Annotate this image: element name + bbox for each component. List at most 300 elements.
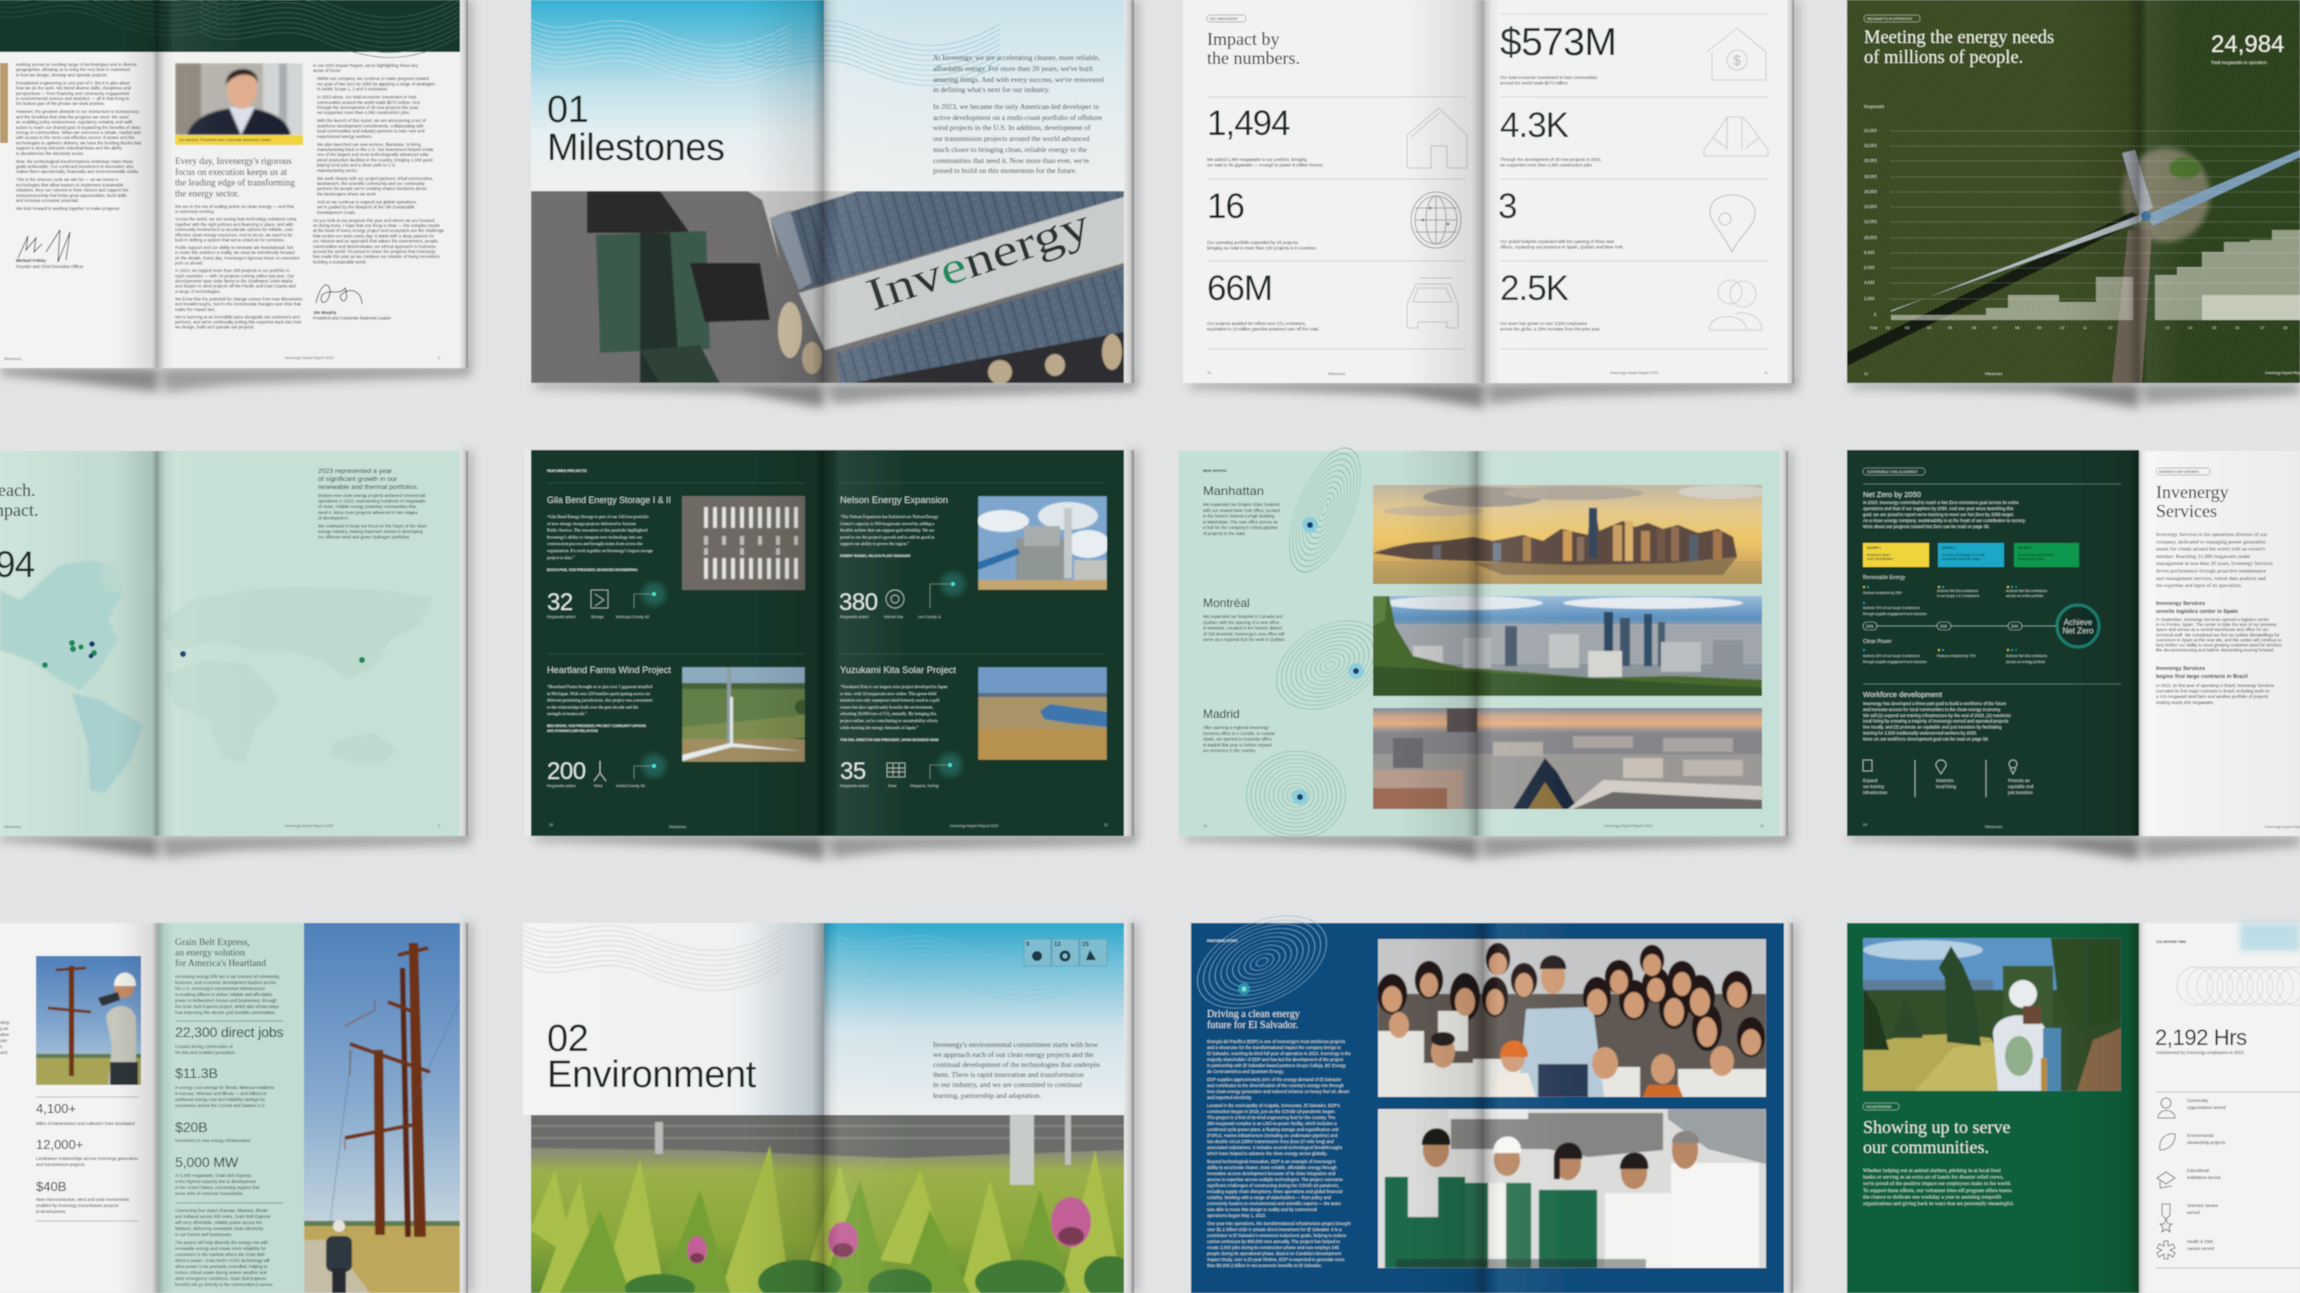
news: logistics center in Spain: help further our ability to meet growing customer need for services: [2156, 642, 2282, 648]
project: Heartland Farms: strength of teamwork.”: [547, 711, 587, 716]
key highlights badge: KEY HIGHLIGHTS: [1210, 17, 1238, 21]
project: Gila Bend: 32: [547, 589, 573, 616]
stat descriptions: offices, expanding our presence in Spain, Québec and New York.: [1500, 245, 1624, 250]
left page stats: in development: [36, 1209, 66, 1214]
left column letter text: the bottom part of the phrase we work positive.: [16, 101, 105, 106]
volunteering badge: [1863, 1103, 1899, 1110]
services intro: and management services, robust data analysis and: [2156, 576, 2266, 582]
project: Nelson: Megawatts added: [840, 615, 868, 619]
Grain Belt heading: an energy solution: [175, 949, 245, 959]
left column letter text: action to reach our shared goal of expanding the benefits of clean: [16, 125, 141, 130]
workforce labels: Promote an: [2008, 778, 2030, 783]
letter right column bullets: experienced energy workers.: [317, 134, 372, 139]
left page text fragments: and: [0, 1050, 8, 1055]
workforce labels: equitable and: [2008, 784, 2034, 789]
footer: Milestones: [1985, 372, 2002, 376]
icon: globe: [1411, 192, 1461, 248]
map marker: [1238, 983, 1250, 995]
key highlights badge: [1207, 15, 1246, 22]
left column letter text: to decarbonize the electricity sector.: [16, 151, 84, 156]
Grain Belt stat text: is the highest-capacity line in development: [175, 1179, 257, 1184]
body text: the chance to dedicate one workday a year to assisting nonprofit: [1863, 1193, 2002, 1200]
intro text: much closer to bringing clean, reliable energy to the: [933, 145, 1088, 154]
letter right column bullets: building a sustainable world.: [313, 259, 367, 264]
photo: engineer with binoculars: [36, 955, 142, 1086]
intro text: in defining what's next for our industry.: [933, 85, 1050, 94]
panel: sustainability and services spread: [1847, 450, 2300, 836]
portrait photo: [174, 62, 303, 136]
letter body text: on the details. Every day, Invenergy's rigorous focus on execution: [175, 255, 300, 260]
dividers: [1207, 14, 1768, 349]
x axis labels: Year: [1870, 326, 1878, 330]
footer: 11: [1104, 823, 1108, 827]
renewable energy row: Achieve 70% of our scope 3 emissions: [1863, 606, 1920, 610]
x axis labels: 03: [1905, 326, 1909, 330]
growth body text: of clean, reliable energy powering communities that: [318, 504, 417, 509]
project: Gila Bend: project to date.”: [547, 555, 575, 560]
y axis labels: 2,000: [1864, 296, 1875, 301]
stat descriptions: bringing our total to more than 100 projects in 8 countries.: [1207, 246, 1317, 251]
workforce development: [1863, 690, 2012, 741]
y axis labels: 18,000: [1864, 174, 1877, 179]
left column letter text: with access to the most cost-effective source of power and the: [16, 135, 135, 140]
feature body text: El Salvador, reaching its third full year of operation in 2023. Invenergy is the: [1207, 1051, 1351, 1056]
letter right column bullets: we supported more than 4,300 construction jobs.: [317, 110, 410, 115]
office: Madrid: our presence in the country.: [1203, 748, 1256, 753]
project: Yuzukami Kita: while meeting the energy demands of Japan.”: [840, 725, 918, 730]
services intro: management in less than 20 years, Invenergy Services: [2156, 561, 2273, 567]
Grain Belt stats: 22,300 direct jobs: [175, 1025, 284, 1041]
yellow caption bar: [175, 135, 303, 145]
x axis labels: 05: [1948, 326, 1952, 330]
Grain Belt body text: to our homes and businesses.: [175, 1232, 232, 1237]
news: contracts in Brazil: [2156, 666, 2274, 705]
left page text fragments: use: [0, 1038, 8, 1043]
service list labels: served: [2187, 1210, 2200, 1215]
intro text: active development on a multi-coast portfolio of offshore: [933, 113, 1103, 122]
map: Europe Asia Africa Australia: [100, 560, 433, 762]
y axis labels: 24,000: [1864, 128, 1877, 133]
left column letter text: goals achievable. Our continued investment in innovation also: [16, 164, 134, 169]
office: Madrid: in Madrid this year to further expand: [1203, 742, 1272, 747]
y axis labels: 0: [1874, 312, 1877, 317]
photo: Montreal skyline: [1372, 596, 1762, 696]
news: logistics center in Spain: customers in Spain at this new site, and the center will continue to: [2156, 637, 2282, 642]
feature body text: over $1.1 billion USD in private direct investment for El Salvador. It is a: [1207, 1227, 1342, 1232]
news: logistics center in Spain: space and serves as a central warehouse and office for our: [2156, 627, 2269, 632]
left column letter text: in how we design, develop and operate projects.: [16, 72, 108, 77]
scope box: green: [2014, 543, 2079, 567]
left column letter text: support a strong domestic industrial base and the ability: [16, 146, 123, 151]
achieve net zero circle: Achieve: [2064, 618, 2093, 627]
intro text: in our industry, and we are committed to continual: [933, 1080, 1082, 1089]
Grain Belt body text: and Indiana) across 800 miles, Grain Belt Express: [175, 1214, 271, 1219]
stat numbers: 1,494: [1207, 104, 1290, 143]
dark green header band: [0, 0, 460, 58]
left column letter text: how we do the work. We blend diverse skills, disciplines and: [16, 86, 131, 91]
letter body text: a range of technologies.: [175, 289, 221, 294]
letter body text: developments span solar farms to the Southwest Union Maize: [175, 278, 294, 284]
letter right column bullets: to tackle Scope 1, 2 and 3 emissions.: [317, 87, 388, 92]
letter body text: Across the world, we are seeing how technology solutions come: [175, 217, 297, 222]
workforce labels: Expand: [1863, 778, 1878, 783]
services intro: the expertise and input of its specialists.: [2156, 582, 2242, 589]
feature body text: de Centroamérica and Quantum Energy.: [1207, 1069, 1284, 1074]
left column letter text: makes them operationally, financially and environmentally viable.: [16, 169, 139, 174]
photo: students with project leader: [1377, 938, 1767, 1098]
y axis labels: 8,000: [1864, 250, 1875, 255]
workforce development: training for 2,500 traditionally underserved workers by 2030.: [1863, 730, 1977, 736]
left column letter text: We look forward to working together to make progress.: [16, 206, 120, 211]
project: Heartland Farms: Megawatts added: [547, 784, 575, 788]
yellow caption bar: Jim Murphy, President and Corporate Business Leader: [179, 138, 272, 142]
letter right column bullets: manufacturing sector.: [317, 168, 358, 173]
services intro: mindset. Reaching 21,000 megawatts under: [2156, 554, 2251, 560]
feature body text: Located in the municipality of Acajutla, Sonsonate, El Salvador, EDP's: [1207, 1103, 1340, 1108]
project: Heartland Farms: Gratiot County, MI: [616, 784, 645, 788]
services heading: Invenergy: [2156, 482, 2229, 502]
workforce development: and increase access for local communities to the clean energy economy.: [1863, 707, 2001, 712]
feature body text: than $6,000.2 billion in net economic benefits to El Salvador.: [1207, 1263, 1322, 1268]
left column letter text: technologies to optimize delivery, we have the building blocks that: [16, 140, 142, 145]
footer: Milestones: [1985, 825, 2002, 829]
letter right column bullets: on doing more, I hope that one thing is clear — the complex needs: [313, 223, 440, 228]
feature body text: including supply chain disruptions, three operations and global financial: [1207, 1189, 1342, 1194]
growth body text: Sixteen new clean energy projects achieved commercial: [318, 493, 425, 498]
clean power row: Achieve 25% of our scope 3 emissions: [1863, 654, 1920, 658]
letter body text: and breakthroughs, but it's the incremental changes over time that: [175, 302, 302, 307]
Grain Belt stat text: the line and enabled generation: [175, 1050, 236, 1055]
panel: Grain Belt Express spread: [0, 923, 468, 1293]
letter body text: Public support and our ability to innovate are foundational. But: [175, 245, 294, 250]
project: Nelson: 380: [839, 589, 878, 616]
office: Manhattan: We expanded our Empire State footprint: [1203, 502, 1280, 507]
office marker: Manhattan: [1302, 517, 1318, 533]
signatory name: Founder and Chief Executive Officer: [16, 264, 84, 269]
left column letter text: Now, the technological transformations underway make these: [16, 159, 134, 164]
footer: Milestones: [669, 825, 686, 829]
footer: Invenergy Impact Report 2023: [950, 824, 998, 828]
news: logistics center in Spain: in As Pontes, Spain. The center is triple the size of our previous: [2156, 622, 2277, 627]
key badge: [1864, 15, 1920, 22]
project: Yuzukami Kita: “Yuzukami Kita is our largest solar project developed in Japan: [840, 684, 948, 689]
left column letter text: perspectives — from financing and community engagement: [16, 91, 130, 96]
scope box: teal: [1938, 543, 2004, 567]
scope box: yellow: level electrification: [1867, 557, 1893, 561]
news: logistics center in Spain: like decommissioning and turbine dismantling moving forward.: [2156, 648, 2274, 653]
service list labels: organizations served: [2187, 1105, 2226, 1110]
Grain Belt stats: 5,000 MW: [175, 1155, 239, 1171]
panel: world map reach spread: [0, 451, 468, 836]
Grain Belt body text: will carry affordable, reliable power across the: [175, 1220, 263, 1225]
project: Heartland Farms: different permitting jurisdictions, this project was a testament: [547, 698, 653, 704]
x axis labels: 10: [2060, 326, 2064, 330]
letter right column bullets: As you look at our progress this year and where we are focused: [313, 218, 435, 223]
left column letter text: energy to communities. When we overcome a rebate, market and: [16, 130, 141, 135]
left page stats: Miles of transmission and collection lines developed: [36, 1121, 135, 1126]
section label: NEW OFFICES: [1203, 469, 1227, 473]
y axis labels: 12,000: [1864, 219, 1877, 224]
renewable energy row: through supplier engagement and reduction: [1863, 612, 1927, 616]
growth heading: of significant growth in our: [318, 476, 398, 483]
Grain Belt intro: the U.S. Invenergy's transmission infrastructure: [175, 986, 266, 991]
project: Heartland Farms: AND STAKEHOLDER RELATIONS: [547, 729, 598, 733]
office: Montreal: Montréal: [1203, 596, 1250, 610]
section label: FEATURED STORY: [1207, 939, 1238, 943]
footer: 24: [1863, 823, 1867, 827]
project: Heartland Farms: to the relationships built over the past decade and the: [547, 704, 638, 709]
intro text: wind projects in the U.S. In addition, development of: [933, 123, 1091, 132]
letter body text: We know that the potential for change comes from new discoveries: [175, 296, 302, 301]
feature body text: (FSRU), marine infrastructure (including an underwater pipeline) and: [1207, 1133, 1338, 1138]
feature body text: and a showcase for the transformational impact the company brings to: [1207, 1045, 1341, 1050]
project: Gila Bend: Gila Bend Energy Storage I & II: [547, 495, 671, 506]
left page stats: Landowner relationships across Invenergy generation: [36, 1156, 139, 1161]
footer: 18: [1203, 824, 1207, 828]
office: Manhattan: of projects in the state.: [1203, 531, 1246, 536]
scope box: teal: renewable electricity usage: [1942, 557, 1981, 561]
volunteering badge: VOLUNTEERISM: [1866, 1105, 1891, 1109]
letter right column bullets: We also launched our new venture, Illuminate, to bring: [317, 142, 421, 147]
heading: of millions of people.: [1864, 48, 2023, 68]
feature body text: construction began in 2019, just as the COVID-19 pandemic began.: [1207, 1109, 1336, 1114]
office: Montreal: We expanded our footprint in Canada and: [1203, 614, 1283, 619]
feature body text: carbon emissions by 800,000 tons annually. The project has helped to: [1207, 1239, 1341, 1244]
clean power row: [1863, 639, 2047, 664]
x axis labels: 04: [1927, 326, 1931, 330]
photo: Heartland Farms turbine: [681, 666, 806, 763]
footer: 10: [549, 823, 553, 827]
letter body text: We're learning at an incredible pace alongside our customers and: [175, 314, 300, 319]
growth heading: renewable and thermal portfolios.: [318, 484, 419, 491]
office: Manhattan: a hub for the company's robust pipeline: [1203, 525, 1278, 530]
news: logistics center in Spain: Invenergy Services: [2156, 601, 2205, 607]
footer: Milestones: [4, 825, 21, 829]
news: contracts in Brazil: executed its first major contracts in Brazil, including work on: [2156, 689, 2270, 694]
letter right column bullets: through the development of 28 new projects this year,: [317, 105, 419, 110]
signatory name Jim Murphy: President and Corporate Business Leader: [313, 316, 392, 320]
icon: house with dollar: [1707, 28, 1766, 80]
intro text: communities that need it. Now more than ever, we're: [933, 156, 1090, 165]
intro text: learning, partnership and adaptation.: [933, 1091, 1041, 1100]
services badge: BUSINESS UNIT GROWTH: [2159, 470, 2199, 474]
footer: Milestones: [1328, 372, 1345, 376]
photo: Nelson plant: [977, 495, 1108, 591]
project: Gila Bend: [547, 495, 671, 619]
service list labels: Educational: [2187, 1168, 2209, 1173]
map markers: [42, 640, 365, 668]
dividers: [547, 483, 1106, 654]
headline stat: 24,984: [2211, 31, 2284, 58]
Grain Belt stat text: consumers across the Central and Eastern U.S.: [175, 1103, 266, 1108]
renewable energy row: Reduce emissions by 25%: [1863, 591, 1902, 595]
feature body text: and imported electricity.: [1207, 1095, 1252, 1100]
stacked bar chart: [1891, 230, 2300, 320]
chapter title: 01: [547, 89, 588, 131]
photo: Madrid skyline: [1372, 708, 1762, 810]
Grain Belt body text: Connecting four states (Kansas, Missouri, Illinois: [175, 1208, 268, 1213]
service list labels: causes served: [2187, 1246, 2215, 1251]
icon: house: [1407, 108, 1467, 168]
feature body text: contributor to El Salvador's emissions reductions goals, helping to reduce: [1207, 1233, 1347, 1238]
workforce labels: our training: [1863, 784, 1885, 789]
left column letter text: solutions, they can reinvest in their citizens and support the: [16, 188, 129, 193]
panel: El Salvador feature spread: [1183, 897, 1793, 1293]
stat descriptions: around the world totals $573 million.: [1500, 81, 1569, 86]
clean power row: Clean Power: [1863, 639, 1892, 645]
project: Gila Bend: Invenergy's ability to integrate new technology into our: [547, 534, 643, 539]
photo: Yuzukami Kita solar: [977, 666, 1108, 761]
services intro: assets for clients around the world with an owner's: [2156, 546, 2265, 553]
contour map: Quebec: [1261, 603, 1399, 727]
project: Heartland Farms: BEN KROHN, VICE PRESIDENT, PROJECT COMMUNITY AFFAIRS: [547, 724, 646, 728]
SDG icons: 13: [1054, 942, 1061, 948]
project: Nelson: Natural Gas: [884, 615, 903, 619]
left column letter text: entrepreneurship that helps grow opportunities, build skills: [16, 193, 127, 198]
letter body text: We are in the era of scaling action on clean energy — and that: [175, 204, 295, 209]
renewable energy row: Achieve Net Zero emissions: [2006, 589, 2047, 593]
chapter title: 02: [547, 1018, 588, 1060]
net zero text: operations and that of our suppliers by 2050. And one year since launching this: [1863, 506, 2013, 511]
SDG icons: [1024, 939, 1107, 966]
feature body text: Impact Study, over a 20-year lifetime, EDP is expected to generate more: [1207, 1257, 1345, 1262]
left page stats: 12,000+: [36, 1137, 83, 1152]
feature body text: in partnership with El Salvador-based partners Grupo Calleja, BC Energy: [1207, 1063, 1347, 1068]
contour map: New York: [1275, 439, 1375, 581]
map: Americas: [0, 560, 143, 793]
signature Jim Murphy: [316, 285, 362, 304]
stat descriptions: we supported more than 4,300 construction jobs.: [1500, 163, 1593, 168]
footer: 19: [1760, 824, 1764, 828]
letter body text: puts us ahead.: [175, 261, 203, 266]
left page text fragments: s: [0, 1044, 2, 1049]
clean power row: Reduce emissions by 70%: [1937, 654, 1976, 658]
project: Heartland Farms: 200: [547, 758, 586, 785]
Grain Belt stat text: Investment in new energy infrastructure: [175, 1138, 251, 1143]
y axis labels: 14,000: [1864, 204, 1877, 209]
sustainability badge: [1863, 468, 1925, 475]
feature body text: majority shareholder of EDP and has led the development of the project: [1207, 1057, 1344, 1062]
feature body text: innovative access development because of its close integration and: [1207, 1171, 1336, 1176]
project: Nelson: [839, 495, 948, 619]
office: Manhattan: with our newest New York office, located: [1203, 508, 1280, 513]
feature body text: was able to move this design to reality and by commercial: [1207, 1207, 1317, 1212]
scope box: green: Develop key partnerships: [2018, 553, 2054, 557]
letter right column bullets: that excites our team every day. It starts with a deep passion for: [313, 233, 435, 238]
growth body text: need it. Many more projects advanced to late stages: [318, 510, 418, 515]
SDG icons: 9: [1026, 942, 1030, 948]
feature body text: and contributes to the diversification of the country's energy mix through: [1207, 1083, 1344, 1088]
workforce development: More on our workforce development goal can be read on page 58.: [1863, 736, 1989, 741]
scope box: green: furthering the goal: [2018, 557, 2044, 561]
news: logistics center in Spain: In September, Invenergy Services opened a logistics center: [2156, 617, 2270, 622]
clean power row: Achieve Net Zero emissions: [2006, 654, 2047, 658]
signature Michael Polsky: [18, 230, 70, 262]
intro text: poised to build on this momentum for the future.: [933, 166, 1077, 175]
pull quote: Every day, Invenergy's rigorous: [175, 156, 292, 166]
pull quote: the leading edge of transforming: [175, 178, 295, 188]
achieve net zero circle: [2057, 605, 2099, 647]
icon: house with dollar: $: [1733, 52, 1741, 68]
x axis labels: 15: [2212, 326, 2216, 330]
x axis labels: 13: [2165, 326, 2169, 330]
Grain Belt stat text: in the United States, connecting regions that: [175, 1185, 260, 1190]
news: logistics center in Spain: technical staff. We completed our first six turbine dismantlings for: [2156, 632, 2280, 637]
news: contracts in Brazil: begins first large contracts in Brazil: [2156, 674, 2248, 680]
project: Gila Bend: Storage: [591, 615, 604, 619]
SDG icons: 15: [1082, 942, 1089, 948]
letter right column bullets: We work closely with our project partners, tribal communities,: [317, 176, 433, 181]
letter body text: we design, build and operate our projects.: [175, 325, 255, 330]
project: Yuzukami Kita: Yuzukami Kita Solar Project: [840, 665, 956, 676]
renewable energy row: [1863, 575, 2047, 616]
stat descriptions: Our team has grown to over 2,500 employees: [1500, 321, 1587, 326]
news: logistics center in Spain: [2156, 601, 2282, 653]
stat descriptions: our total to 35 gigawatts — enough to power 8 million homes.: [1207, 163, 1324, 168]
body text: we're proud of the positive impact our employees make in the world.: [1863, 1180, 2011, 1187]
scope box: yellow: SCOPE 1: [1867, 546, 1881, 550]
office: Madrid: Madrid: [1203, 707, 1240, 721]
Grain Belt intro: how improving the electric grid benefits communities.: [175, 1010, 276, 1015]
footer: 9: [438, 356, 440, 360]
renewable energy row: Achieve Net Zero emissions: [1937, 589, 1978, 593]
chart grid lines: [1890, 131, 2300, 299]
photo: aerial of Invenergy battery containers: [530, 190, 1124, 384]
renewable energy row: across our entire portfolio: [2006, 594, 2043, 598]
feature body text: community leaders to environmental and scientific experts — the team: [1207, 1201, 1341, 1206]
letter right column bullets: has made this year as we continue our mission of being innovators: [313, 254, 440, 259]
left page stats: [36, 1097, 139, 1221]
growth body text: operations in 2023, representing hundreds of megawatts: [318, 499, 426, 504]
office: Manhattan: in Manhattan. The new office serves as: [1203, 519, 1278, 524]
letter right column bullets: Within our company, we continue to make progress toward: [317, 76, 429, 81]
Grain Belt heading: for America's Heartland: [175, 958, 266, 969]
stat number $573M: $573M: [1500, 21, 1616, 64]
pull quote: focus on execution keeps us at: [175, 167, 287, 177]
footer: Invenergy Impact Report 2023: [285, 356, 333, 360]
growth body text: of development.: [318, 515, 349, 520]
project: Heartland Farms: in Michigan. With over 230 families participating across six: [547, 691, 651, 696]
project: Gila Bend: Maricopa County, AZ: [616, 615, 650, 619]
left column letter text: and increase economic potential.: [16, 198, 79, 203]
project: Nelson: Center's capacity to 960 megawatts served by adding a: [840, 521, 934, 526]
project: Yuzukami Kita: project online, we're contributing to sustainability efforts: [840, 718, 938, 724]
panel: volunteering spread: [1847, 923, 2300, 1293]
contour map: Spain: [1246, 751, 1346, 839]
project: Yuzukami Kita: course but also significantly benefits the environment,: [840, 704, 933, 710]
x axis labels: 16: [2235, 326, 2239, 330]
Grain Belt intro: Increasing energy bills are a top concern of community,: [175, 974, 280, 979]
office: Montreal: of Old Montréal, Invenergy's new office will: [1203, 631, 1284, 636]
Grain Belt stat text: Created during construction of: [175, 1044, 233, 1049]
body text: banks or serving as an extra set of hands for disaster relief crews,: [1863, 1174, 2004, 1181]
section label: FEATURED PROJECTS: [547, 469, 587, 473]
body text: To support these efforts, our volunteer time-off program offers teams: [1863, 1187, 2012, 1194]
body text: Whether helping out at animal shelters, pitching in at local food: [1863, 1167, 2001, 1174]
letter right column bullets: the landscapes where we work.: [317, 191, 377, 196]
heading: Showing up to serve: [1863, 1117, 2010, 1137]
letter right column bullets: paying local jobs and a clean path to U.S.: [317, 163, 396, 168]
pull quote: the energy sector.: [175, 188, 239, 198]
intro text: Invenergy's environmental commitment starts with how: [933, 1040, 1098, 1049]
project: Yuzukami Kita: offsetting 30,000 tons of CO₂ annually. By bringing this: [840, 711, 937, 717]
office: Madrid: [1203, 707, 1275, 753]
intro text: In 2023, we became the only American-led developer in: [933, 102, 1099, 111]
scope box: green: SCOPE 3: [2018, 546, 2032, 550]
heading: our communities.: [1863, 1137, 1989, 1157]
letter right column bullets: manufacturing back to the U.S. Our investment helped create: [317, 147, 434, 152]
workforce labels: local hiring: [1936, 784, 1957, 789]
